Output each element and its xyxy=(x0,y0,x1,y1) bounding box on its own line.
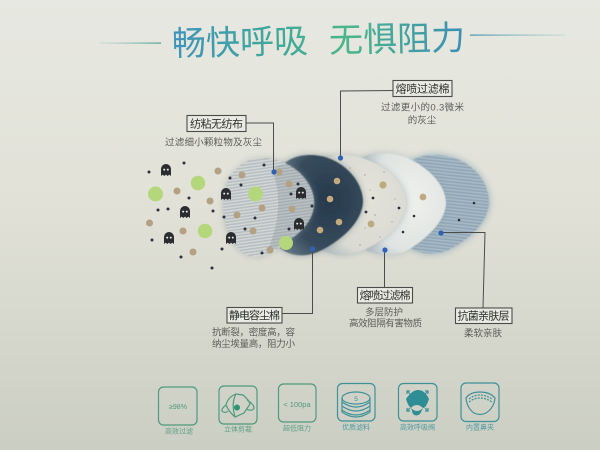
callout: melt-blown filter bottom: 熔喷过滤棉 xyxy=(360,288,410,302)
callout: spunbond nonwoven: 纺粘无纺布 xyxy=(190,116,243,130)
icon: low resistance under 100pa: < 100pa xyxy=(283,400,311,409)
callout: melt-blown filter bottom xyxy=(349,247,422,330)
mask layers exploded diagram xyxy=(146,153,490,270)
title with side rules xyxy=(100,19,565,64)
icon: high filtration 98% xyxy=(158,387,197,436)
title text: 畅快呼吸 xyxy=(172,23,308,64)
callout: antibacterial skin layer: 柔软亲肤 xyxy=(464,328,502,340)
callout: melt-blown filter top xyxy=(338,80,464,161)
callout: electrostatic cotton xyxy=(212,246,315,350)
title text: 无惧阻力 xyxy=(329,19,465,60)
tan particles xyxy=(146,168,296,256)
icon: low resistance under 100pa xyxy=(278,384,316,432)
layer 3: speckled melt-blown layer xyxy=(320,155,407,255)
callout: melt-blown filter top: 的灰尘 xyxy=(408,114,437,126)
icon: five layer filter stack xyxy=(338,384,375,432)
title text xyxy=(172,19,465,64)
layer 4: white melt-blown layer xyxy=(362,153,446,255)
icon: high filtration 98%: 高效过滤 xyxy=(165,426,193,436)
icon: breathing valve xyxy=(398,384,437,432)
callout: electrostatic cotton: 抗断裂，密度高，容 xyxy=(212,326,295,338)
callout: melt-blown filter top: 熔喷过滤棉 xyxy=(396,82,450,96)
icon: high filtration 98%: ≥98% xyxy=(169,404,187,411)
callout: melt-blown filter top: 过滤更小的0.3微米 xyxy=(381,102,464,114)
icon: five layer filter stack: 5 xyxy=(354,396,358,403)
icon row xyxy=(158,383,499,436)
callout: spunbond nonwoven: 过滤细小颗粒物及灰尘 xyxy=(165,136,262,148)
airborne particles xyxy=(146,162,314,270)
callout: electrostatic cotton: 静电容尘棉 xyxy=(229,308,280,322)
icon: built-in nose clip: 内置鼻夹 xyxy=(466,422,494,432)
callout: electrostatic cotton: 纳尘埃量高，阻力小 xyxy=(212,338,295,350)
icon: 3D cut mask: 立体剪裁 xyxy=(224,424,252,434)
callout: melt-blown filter bottom: 多层防护 xyxy=(365,306,403,318)
layer 5: skin-friendly denim layer xyxy=(408,154,490,255)
callout: antibacterial skin layer xyxy=(438,230,512,340)
ghost germs xyxy=(161,164,306,244)
layer 1: spunbond fabric layer xyxy=(223,158,314,257)
icon: 3D cut mask xyxy=(219,386,257,434)
callout: antibacterial skin layer: 抗菌亲肤层 xyxy=(458,308,510,322)
icon: breathing valve: 高效呼吸阀 xyxy=(400,422,435,432)
icon: low resistance under 100pa: 超低阻力 xyxy=(283,424,311,432)
dark dust dots xyxy=(148,162,314,270)
icon: five layer filter stack: 优质滤料 xyxy=(342,422,370,432)
callout: melt-blown filter bottom: 高效阻隔有害物质 xyxy=(349,318,422,330)
green particles xyxy=(148,176,293,250)
icon: built-in nose clip xyxy=(461,383,499,432)
callout: spunbond nonwoven xyxy=(165,116,277,175)
layer 2: dark electrostatic layer xyxy=(280,155,363,255)
